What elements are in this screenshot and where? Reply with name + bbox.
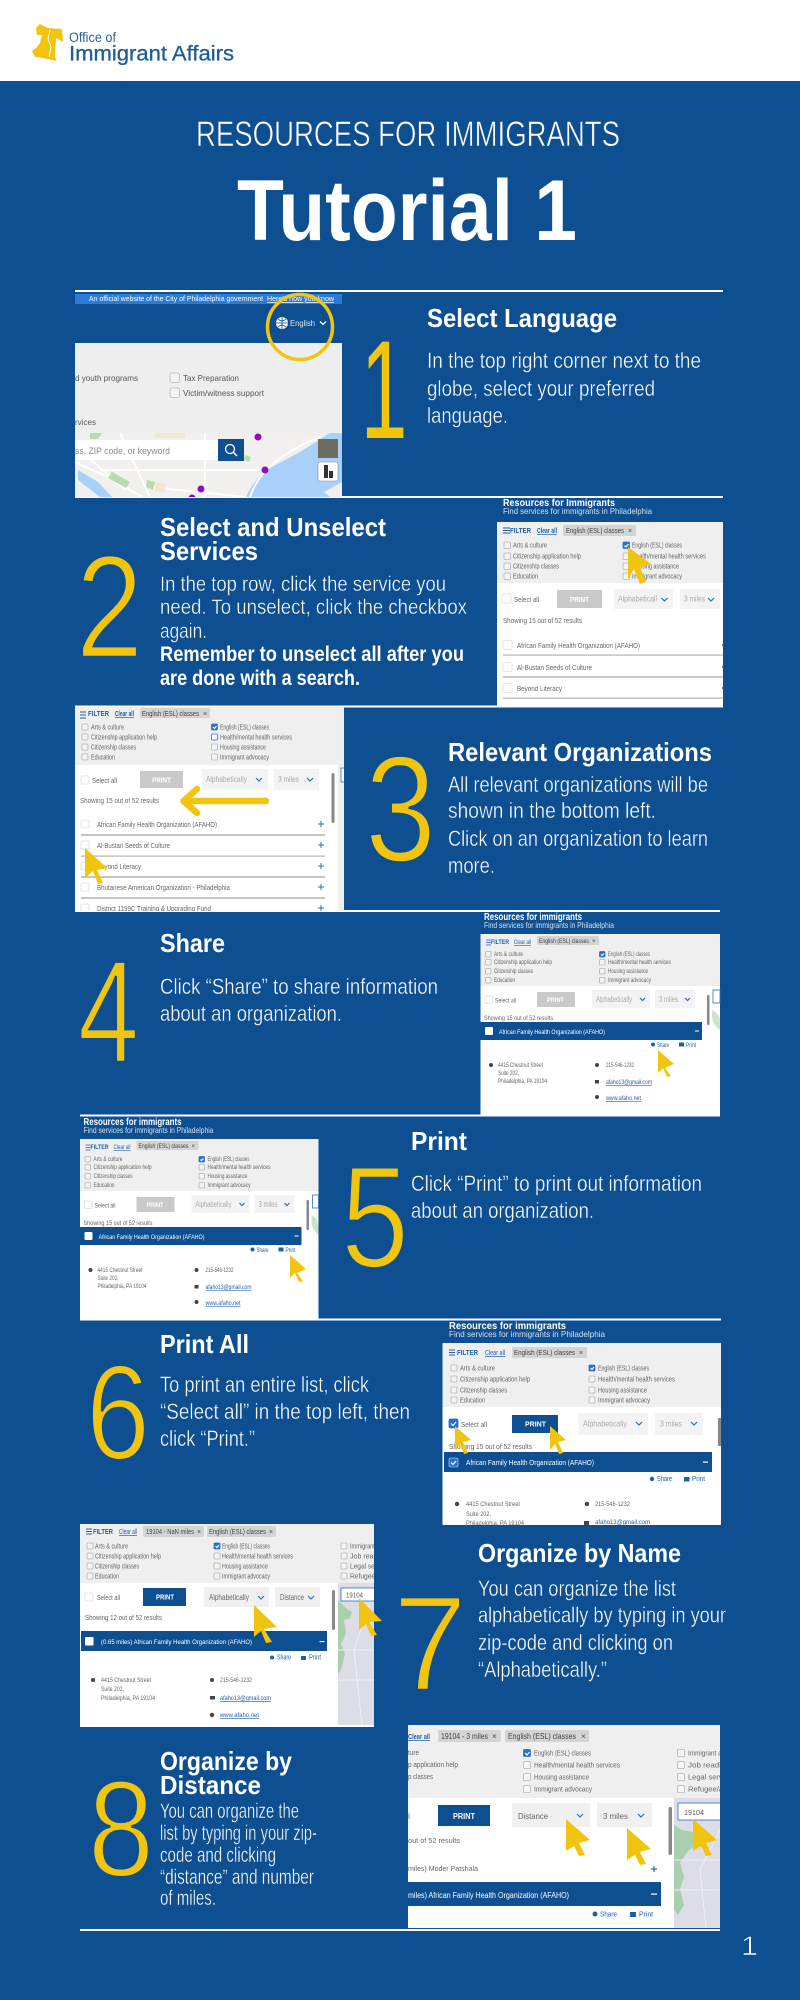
screenshot: share button: Health/mental health services (608, 960, 671, 966)
screenshot: alphabetical sort: FILTER (93, 1529, 113, 1536)
screenshot: distance sort (406, 1725, 745, 1928)
panel: step 8 organize by distance (88, 1725, 745, 1928)
screenshot: results list: Arts & culture (91, 724, 124, 732)
highlight circle (268, 294, 332, 360)
screenshot: results list: District 1199C Training & Upgrading Fund (97, 906, 211, 913)
screenshot: print button: English (ESL) classes (138, 1143, 189, 1150)
screenshot: print button (80, 1117, 318, 1319)
screenshot: alphabetical sort: www.afaho.net (219, 1712, 259, 1719)
body text: Remember to unselect all after you (160, 643, 464, 666)
screenshot: print button: 4415 Chestnut Street (98, 1268, 143, 1274)
screenshot: distance sort: English (ESL) classes (508, 1732, 576, 1741)
screenshot: select all and print: Housing assistance (598, 1388, 647, 1394)
screenshot: select all and print: Health/mental health services (598, 1376, 675, 1384)
heading: Organize by (160, 1746, 292, 1776)
heading (160, 1746, 292, 1800)
screenshot: print button: afaho13@gmail.com (206, 1285, 252, 1291)
icon: cursor arrow on distance (566, 1819, 590, 1856)
screenshot: print button: Philadelphia, PA 19104 (98, 1284, 147, 1290)
screenshot: alphabetical sort: × (269, 1529, 273, 1536)
screenshot: filter checkboxes: Showing 15 out of 52 results (503, 618, 582, 625)
screenshot: alphabetical sort: Refugee/asylum (350, 1574, 398, 1580)
screenshot: share button: Clear all (514, 940, 531, 946)
screenshot: share button: African Family Health Organization (AFAHO) (499, 1029, 605, 1036)
screenshot: alphabetical sort: (0.65 miles) African Family Health Organization (AFAHO) (101, 1639, 252, 1646)
screenshot: filter checkboxes: English (ESL) classes (632, 542, 682, 550)
screenshot: language selector: Here's how you know (267, 294, 335, 303)
screenshot: distance sort: English (ESL) classes (534, 1750, 591, 1758)
screenshot: select all and print: Citizenship application help (460, 1376, 530, 1384)
screenshot: select all and print: × (579, 1350, 583, 1357)
screenshot: print button: Health/mental health services (208, 1165, 270, 1171)
screenshot: alphabetical sort: Legal services (350, 1564, 392, 1570)
screenshot: distance sort: 19104 - 3 miles (441, 1732, 488, 1741)
screenshot: select all and print: Find services for immigrants in Philadelphia (449, 1329, 605, 1339)
body text: All relevant organizations will be (448, 772, 708, 797)
screenshot: distance sort: p classes (408, 1774, 433, 1781)
screenshot: language selector: ss, ZIP code, or keyword (75, 446, 170, 457)
screenshot: alphabetical sort (80, 1524, 400, 1727)
icon: cursor arrow (658, 1050, 674, 1077)
screenshot: print button: English (ESL) classes (208, 1157, 250, 1163)
body text (160, 573, 467, 690)
body text: Click “Share” to share information (160, 974, 438, 999)
numeral 4: 4 (78, 930, 139, 1093)
screenshot: alphabetical sort: 19104 (346, 1592, 363, 1600)
screenshot: print button: Clear all (114, 1145, 130, 1151)
screenshot: results list: Housing assistance (220, 744, 266, 752)
body text: In the top right corner next to the (427, 348, 701, 373)
screenshot: distance sort: ll (406, 1814, 411, 1821)
icon: cursor arrow (85, 848, 107, 884)
screenshot: print button: Education (94, 1183, 114, 1189)
screenshot: select all and print: Select all (461, 1422, 487, 1429)
screenshot: select all and print: PRINT (525, 1422, 547, 1428)
heading: Share (160, 928, 225, 958)
screenshot: results list: PRINT (152, 778, 172, 784)
screenshot: print button: Find services for immigrants in Philadelphia (84, 1125, 214, 1135)
body text: language. (427, 403, 508, 428)
body text: list by typing in your zip- (160, 1822, 317, 1845)
screenshot: filter checkboxes: Citizenship application help (513, 554, 581, 560)
body text: shown in the bottom left. (448, 798, 656, 823)
screenshot: distance sort: Print (639, 1910, 654, 1918)
screenshot: print button: Resources for immigrants (84, 1117, 182, 1128)
numeral 8: 8 (88, 1753, 154, 1906)
screenshot: print button: Immigrant advocacy (208, 1183, 250, 1189)
screenshot: distance sort: miles) Moder Patshala (408, 1864, 479, 1873)
screenshot: alphabetical sort: Job readiness (350, 1554, 394, 1560)
body text: of miles. (160, 1887, 216, 1910)
panel: step 2 select and unselect services (76, 498, 725, 706)
screenshot: share button: Arts & culture (494, 952, 524, 958)
screenshot: alphabetical sort: Clear all (119, 1529, 137, 1536)
icon: cursor arrow (290, 1255, 306, 1282)
body text: Click “Print” to print out information (411, 1171, 702, 1196)
screenshot: distance sort: ture (408, 1750, 419, 1757)
screenshot: share button: FILTER (491, 939, 509, 946)
heading: Select and Unselect (160, 512, 386, 542)
screenshot: print button: FILTER (90, 1144, 109, 1151)
screenshot: distance sort: out of 52 results (408, 1836, 460, 1845)
screenshot: print button: Share (256, 1248, 269, 1254)
screenshot: select all and print: Immigrant advocacy (598, 1398, 650, 1404)
screenshot: share button: Education (494, 978, 515, 984)
screenshot: filter checkboxes: Clear all (537, 528, 557, 535)
screenshot: share button: 4415 Chestnut Street (498, 1063, 543, 1069)
screenshot: alphabetical sort: 4415 Chestnut Street (101, 1677, 151, 1684)
screenshot: share button: PRINT (547, 998, 564, 1004)
screenshot: filter checkboxes: 3 miles (684, 594, 705, 604)
screenshot: alphabetical sort: Citizenship application help (95, 1554, 161, 1560)
screenshot: share button: Philadelphia, PA 19104 (498, 1079, 548, 1085)
screenshot: share button: www.afaho.net (605, 1096, 641, 1102)
screenshot: filter checkboxes: FILTER (510, 528, 531, 535)
screenshot: alphabetical sort: English (ESL) classes (209, 1529, 266, 1536)
screenshot: print button: African Family Health Organization (AFAHO) (98, 1234, 204, 1241)
screenshot: language selector: Tax Preparation (183, 373, 239, 383)
screenshot: results list: × (203, 711, 207, 718)
screenshot: results list: Citizenship application help (91, 734, 157, 742)
body text: “Alphabetically.” (478, 1657, 607, 1682)
screenshot: distance sort: Distance (518, 1811, 548, 1821)
screenshot: filter checkboxes: × (628, 528, 632, 535)
screenshot: share button: Select all (495, 998, 516, 1004)
screenshot: select all and print: 3 miles (660, 1420, 682, 1428)
icon: cursor arrow on zip input (693, 1819, 717, 1856)
page number: 1 (741, 1931, 758, 1961)
screenshot: distance sort: × (492, 1732, 497, 1741)
screenshot: language selector: d youth programs (75, 373, 138, 383)
body text: about an organization. (411, 1198, 594, 1223)
screenshot: filter checkboxes: Citizenship classes (513, 564, 559, 570)
screenshot: results list (75, 707, 345, 913)
screenshot: distance sort: Job readiness (688, 1762, 739, 1770)
icon: cursor arrow (628, 547, 651, 584)
screenshot: select all and print: African Family Health Organization (AFAHO) (466, 1460, 594, 1467)
icon: cursor arrow on zip input (359, 1598, 382, 1636)
screenshot: filter checkboxes: Alphabeticall (618, 594, 657, 604)
screenshot: distance sort: 19104 (684, 1808, 704, 1817)
screenshot: results list: English (ESL) classes (142, 709, 199, 718)
panel: step 6 print all (86, 1320, 721, 1527)
screenshot: select all and print: Share (657, 1476, 672, 1483)
screenshot: results list: Beyond Literacy (97, 864, 141, 871)
body text (160, 1800, 317, 1910)
screenshot: results list: Select all (92, 778, 117, 785)
screenshot: alphabetical sort: Health/mental health services (222, 1554, 293, 1560)
heading (160, 512, 386, 566)
screenshot: select all and print: Citizenship classes (460, 1388, 507, 1394)
screenshot: select all and print: Philadelphia, PA 19104 (466, 1520, 524, 1527)
screenshot: share button: afaho13@gmail.com (606, 1080, 652, 1086)
screenshot: print button: 3 miles (258, 1200, 278, 1209)
screenshot: alphabetical sort: Immigrant advocacy (222, 1574, 270, 1580)
screenshot: results list: 3 miles (278, 775, 299, 784)
heading: Print (411, 1126, 467, 1156)
panel: step 1 select language (75, 294, 701, 502)
body text (160, 1372, 410, 1451)
screenshot: share button: Alphabetically (596, 995, 632, 1004)
screenshot: distance sort: Refugee/asylum (688, 1786, 743, 1794)
screenshot: share button: Citizenship classes (494, 969, 533, 975)
body text: about an organization. (160, 1001, 342, 1026)
numeral 3: 3 (365, 724, 436, 893)
screenshot: results list: Citizenship classes (91, 744, 136, 752)
screenshot: results list: Showing 15 out of 52 results (80, 798, 159, 805)
body text: zip-code and clicking on (478, 1630, 673, 1655)
heading: Services (160, 536, 258, 566)
screenshot: results list: FILTER (88, 711, 109, 718)
screenshot: alphabetical sort: 215-546-1232 (220, 1677, 252, 1684)
screenshot: print button: Print (286, 1248, 296, 1254)
screenshot: distance sort: Immigrant advocacy (534, 1786, 592, 1794)
body text: need. To unselect, click the checkbox (160, 596, 467, 619)
screenshot: results list: African Family Health Organization (AFAHO) (97, 822, 217, 829)
screenshot: filter checkboxes: Al-Bustan Seeds of Culture (517, 665, 592, 672)
body text: Click on an organization to learn (448, 826, 708, 851)
screenshot: alphabetical sort: afaho13@gmail.com (220, 1695, 271, 1702)
screenshot: select all and print: English (ESL) classes (514, 1348, 575, 1357)
screenshot: results list: Al-Bustan Seeds of Culture (97, 843, 170, 850)
screenshot: alphabetical sort: × (197, 1529, 201, 1536)
screenshot: share button: Share (657, 1043, 669, 1049)
screenshot: select all and print: Suite 202, (466, 1511, 491, 1518)
screenshot: distance sort: 3 miles (603, 1811, 628, 1821)
screenshot: select all and print: Clear all (485, 1350, 505, 1357)
screenshot: language selector: rvices (75, 417, 96, 427)
screenshot: share button: Suite 202, (498, 1071, 519, 1077)
body text: “Select all” in the top left, then (160, 1399, 410, 1424)
screenshot: print button: Select all (94, 1202, 116, 1210)
body text: code and clicking (160, 1844, 276, 1867)
screenshot: filter checkboxes: Health/mental health services (632, 554, 706, 560)
screenshot: share button: Housing assistance (608, 969, 649, 975)
title: Tutorial 1 (237, 163, 577, 259)
title (196, 115, 620, 259)
screenshot: filter checkboxes: Arts & culture (513, 542, 547, 550)
logo text: Office of (69, 30, 116, 45)
body text: globe, select your preferred (427, 376, 655, 401)
icon: cursor arrow on miles (627, 1828, 651, 1865)
screenshot: select all and print: Education (460, 1398, 485, 1404)
screenshot: print button: Arts & culture (94, 1157, 123, 1163)
screenshot: select all and print: afaho13@gmail.com (595, 1519, 650, 1526)
screenshot: distance sort: p application help (408, 1762, 458, 1769)
screenshot: select all and print (442, 1320, 721, 1527)
screenshot: print button: Housing assistance (208, 1174, 248, 1180)
panel: step 4 share (78, 912, 720, 1116)
screenshot: share button: Showing 15 out of 52 results (484, 1015, 554, 1022)
heading: Select Language (427, 303, 617, 333)
screenshot: results list: Alphabetically (206, 775, 247, 784)
screenshot: results list: English (ESL) classes (220, 724, 269, 732)
screenshot: share button: Find services for immigrants in Philadelphia (484, 920, 614, 930)
logo text: Immigrant Affairs (69, 42, 234, 66)
logo text (69, 30, 234, 66)
header band with logo (0, 0, 800, 81)
heading: Organize by Name (478, 1538, 681, 1568)
screenshot: filter checkboxes (497, 498, 725, 706)
screenshot: filter checkboxes: Find services for immigrants in Philadelphia (503, 506, 652, 516)
screenshot: alphabetical sort: Education (95, 1574, 119, 1580)
screenshot: alphabetical sort: Print (309, 1654, 321, 1662)
screenshot: alphabetical sort: Philadelphia, PA 19104 (101, 1695, 155, 1702)
screenshot: language selector: An official website of the City of Philadelphia government (89, 294, 264, 303)
body text: You can organize the (160, 1800, 299, 1823)
numeral 7: 7 (393, 1568, 467, 1719)
screenshot: distance sort: Share (600, 1910, 617, 1918)
body text: You can organize the list (478, 1576, 676, 1601)
screenshot: share button: 3 miles (659, 995, 678, 1004)
screenshot: distance sort: Housing assistance (534, 1774, 589, 1782)
icon: cursor arrow on print (550, 1426, 566, 1454)
screenshot: distance sort: Health/mental health services (534, 1762, 620, 1770)
screenshot: share button: Resources for immigrants (484, 912, 582, 923)
screenshot: print button: Citizenship classes (94, 1174, 132, 1180)
numeral 2: 2 (76, 525, 143, 688)
body text: again. (160, 620, 207, 643)
screenshot: language selector: English (290, 318, 315, 328)
screenshot: filter checkboxes: Housing assistance (632, 564, 679, 570)
screenshot: share button: Immigrant advocacy (608, 978, 651, 984)
screenshot: results list: Bhutanese American Organization - Philadelphia (97, 885, 230, 892)
screenshot: distance sort: Immigrant advocacy (688, 1750, 745, 1758)
body text: To print an entire list, click (160, 1372, 370, 1397)
screenshot: print button: Suite 202, (98, 1276, 119, 1282)
screenshot: filter checkboxes: Resources for Immigrants (503, 498, 615, 509)
screenshot: results list: Clear all (115, 711, 134, 718)
screenshot: print button: Showing 15 out of 52 results (84, 1220, 153, 1227)
body text: “distance” and number (160, 1866, 314, 1889)
screenshot: select all and print: Resources for immigrants (449, 1320, 566, 1332)
title: RESOURCES FOR IMMIGRANTS (196, 115, 620, 154)
screenshot: results list: Immigrant advocacy (220, 754, 269, 762)
screenshot: alphabetical sort: Share (277, 1654, 291, 1662)
screenshot: filter checkboxes: Select all (514, 597, 539, 604)
screenshot: alphabetical sort: Suite 202, (101, 1686, 124, 1693)
screenshot: select all and print: Arts & culture (460, 1366, 495, 1372)
panel: step 7 organize by name (80, 1524, 726, 1727)
heading: Relevant Organizations (448, 737, 712, 767)
screenshot: print button: www.afaho.net (205, 1301, 241, 1307)
screenshot: distance sort: × (581, 1732, 586, 1741)
body text: more. (448, 853, 495, 878)
screenshot: distance sort: Legal services (688, 1774, 737, 1782)
screenshot: filter checkboxes: African Family Health Organization (AFAHO) (517, 643, 640, 650)
screenshot: share button: Print (686, 1043, 696, 1049)
screenshot: select all and print: 215-546-1232 (595, 1501, 630, 1508)
icon: cursor arrow on alphabetically (254, 1605, 277, 1643)
body text (427, 348, 701, 428)
screenshot: share button: English (ESL) classes (539, 938, 590, 945)
screenshot: alphabetical sort: PRINT (156, 1594, 175, 1602)
body text (478, 1576, 726, 1682)
panel: step 3 relevant organizations (75, 707, 712, 913)
screenshot: distance sort: PRINT (453, 1812, 475, 1821)
screenshot: distance sort: Clear all (408, 1732, 430, 1741)
screenshot: results list: Health/mental health services (220, 734, 292, 742)
screenshot: print button: × (192, 1144, 196, 1150)
screenshot: select all and print: Showing 15 out of 52 results (449, 1444, 532, 1451)
heading: Print All (160, 1329, 249, 1359)
screenshot: alphabetical sort: Arts & culture (95, 1544, 128, 1550)
screenshot: alphabetical sort: Immigrant advocacy (350, 1544, 400, 1550)
screenshot: alphabetical sort: English (ESL) classes (222, 1544, 270, 1550)
screenshot: filter checkboxes: Education (513, 574, 538, 580)
body text: In the top row, click the service you (160, 573, 446, 596)
icon: liberty bell (32, 24, 63, 61)
body text (411, 1171, 702, 1223)
body text: alphabetically by typing in your (478, 1602, 726, 1628)
screenshot: select all and print: 4415 Chestnut Street (466, 1501, 520, 1508)
heading: Distance (160, 1770, 261, 1800)
screenshot: share button: 215-546-1232 (606, 1063, 634, 1069)
screenshot: alphabetical sort: 19104 - NaN miles (146, 1529, 194, 1536)
body text: click “Print.” (160, 1426, 255, 1451)
numeral 6: 6 (86, 1337, 150, 1488)
screenshot: language selector (75, 294, 342, 502)
screenshot: language selector: Victim/witness support (183, 388, 265, 398)
screenshot: alphabetical sort: Distance (280, 1593, 304, 1602)
screenshot: share button: × (592, 939, 596, 945)
screenshot: alphabetical sort: Select all (97, 1595, 120, 1602)
screenshot: print button: PRINT (146, 1203, 164, 1209)
body text: are done with a search. (160, 667, 360, 690)
screenshot: filter checkboxes: Beyond Literacy (517, 686, 562, 693)
screenshot: distance sort: miles) African Family Health Organization (AFAHO) (408, 1891, 569, 1900)
screenshot: alphabetical sort: Showing 12 out of 52 results (85, 1615, 162, 1622)
screenshot: filter checkboxes: PRINT (570, 597, 590, 604)
body text (448, 772, 708, 878)
screenshot: filter checkboxes: Immigrant advocacy (632, 574, 682, 580)
icon: cursor arrow on select all (455, 1426, 471, 1454)
panel: step 5 print (80, 1117, 702, 1319)
screenshot: alphabetical sort: Alphabetically (209, 1593, 249, 1602)
body text (160, 974, 438, 1026)
screenshot: alphabetical sort: Housing assistance (222, 1564, 268, 1570)
screenshot: select all and print: English (ESL) classes (598, 1366, 649, 1372)
numeral 1: 1 (360, 311, 408, 468)
screenshot: results list: Education (91, 754, 115, 762)
screenshot: share button: English (ESL) classes (608, 952, 650, 958)
screenshot: print button: Citizenship application help (94, 1165, 152, 1171)
screenshot: select all and print: Print (692, 1476, 705, 1483)
icon: yellow left arrow (184, 789, 266, 813)
screenshot: select all and print: FILTER (457, 1350, 478, 1357)
screenshot: filter checkboxes: English (ESL) classes (566, 526, 624, 535)
screenshot: share button: Citizenship application help (494, 960, 553, 966)
screenshot: share button (480, 912, 720, 1116)
screenshot: select all and print: Alphabetically (583, 1420, 627, 1428)
screenshot: alphabetical sort: Citizenship classes (95, 1564, 139, 1570)
screenshot: print button: Alphabetically (196, 1200, 232, 1209)
screenshot: print button: 215-546-1232 (206, 1268, 234, 1274)
numeral 5: 5 (341, 1136, 409, 1298)
